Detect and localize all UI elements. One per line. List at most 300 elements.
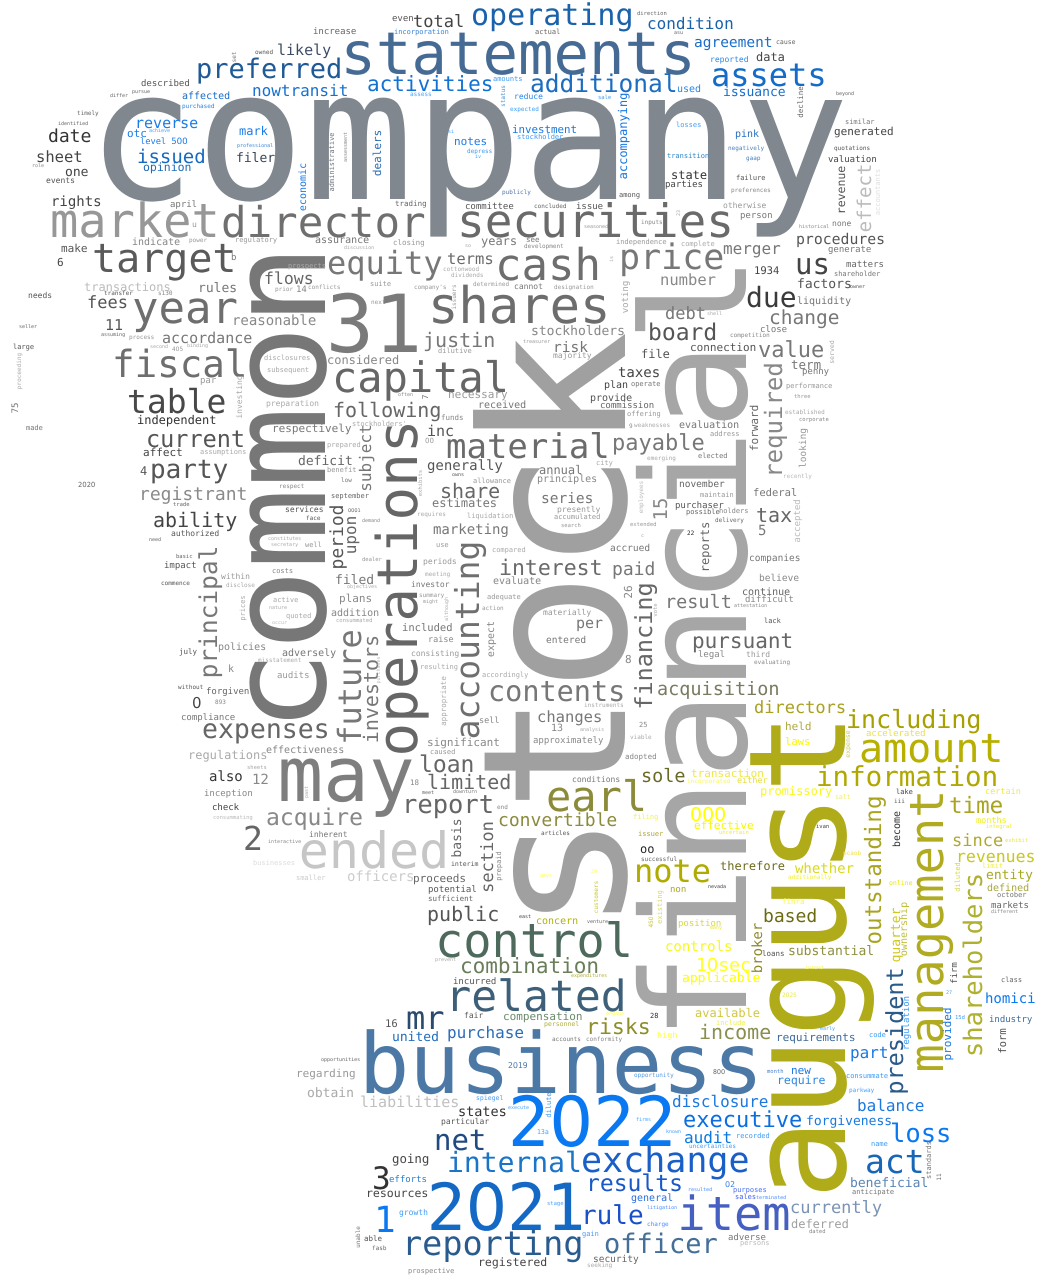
olive and yellow words: outstanding xyxy=(861,795,887,945)
middle grey words: possible xyxy=(686,508,720,516)
olive and yellow words: uncertain xyxy=(719,829,749,836)
middle grey words: elected xyxy=(698,452,728,460)
middle grey words xyxy=(78,362,812,926)
upper blue words: notes xyxy=(454,135,487,148)
olive and yellow words: months xyxy=(976,816,1007,826)
olive and yellow words: combination xyxy=(460,954,599,978)
lower blue and grey words: name xyxy=(871,1140,888,1148)
upper grey words: inputs xyxy=(641,219,663,226)
upper grey words: person xyxy=(740,211,773,221)
upper grey words: established xyxy=(785,409,825,416)
middle grey words: assumptions xyxy=(200,448,246,456)
word: stock: stock xyxy=(440,331,673,933)
upper grey words: term xyxy=(791,357,821,372)
middle grey words: conditions xyxy=(572,775,620,784)
olive and yellow words: incorporated xyxy=(687,778,731,785)
word: business: business xyxy=(359,1015,763,1113)
olive and yellow words: expenditures xyxy=(571,973,607,979)
upper grey words: rights xyxy=(51,194,102,210)
upper grey words: committee xyxy=(465,202,514,212)
upper grey words: pursue xyxy=(132,89,150,95)
upper grey words: 14 xyxy=(296,285,307,295)
lower blue and grey words: growth xyxy=(399,1208,428,1217)
middle grey words: costs xyxy=(272,567,293,575)
olive and yellow words: existing xyxy=(656,890,664,924)
middle grey words: recently xyxy=(783,473,812,480)
middle grey words: well xyxy=(305,541,322,549)
upper grey words: rules xyxy=(198,281,237,296)
middle grey words: might xyxy=(423,599,438,605)
upper blue words: depress xyxy=(467,148,493,155)
lower blue and grey words: loss xyxy=(890,1119,951,1149)
middle grey words: employees xyxy=(638,480,645,513)
middle grey words: city xyxy=(596,459,613,467)
upper grey words: issue xyxy=(576,202,603,212)
olive and yellow words: position xyxy=(678,919,721,929)
upper grey words: provide xyxy=(590,393,632,404)
upper grey words: sheet xyxy=(36,148,83,166)
upper grey words: independence xyxy=(616,238,667,246)
olive and yellow words: amount xyxy=(859,726,1004,772)
lower blue and grey words: litigation xyxy=(647,1205,677,1211)
upper blue words: sale xyxy=(598,94,611,101)
middle grey words: loan xyxy=(419,752,474,778)
upper grey words: make xyxy=(61,242,88,255)
lower blue and grey words: forgiveness xyxy=(806,1114,892,1129)
middle grey words: significant xyxy=(427,736,500,749)
lower blue and grey words: 800 xyxy=(713,1068,725,1076)
olive and yellow words: lake xyxy=(896,788,913,796)
upper grey words: date xyxy=(48,126,91,147)
lower blue and grey words: early xyxy=(820,1026,835,1032)
upper grey words: independent xyxy=(137,413,216,427)
middle grey words: consummating xyxy=(213,814,253,821)
upper grey words: 23 xyxy=(676,210,682,216)
middle grey words: quoted xyxy=(286,612,311,620)
middle grey words: 0001 xyxy=(348,508,361,514)
olive and yellow words: concern xyxy=(536,916,578,927)
olive and yellow words: certain xyxy=(985,787,1021,797)
upper grey words: assessment xyxy=(343,132,349,162)
olive and yellow words: high xyxy=(657,1031,677,1041)
lower blue and grey words: obtain xyxy=(307,1086,354,1101)
middle grey words: evaluating xyxy=(754,659,791,666)
upper grey words: generated xyxy=(834,125,894,138)
lower blue and grey words: spiegel xyxy=(476,1094,503,1102)
middle grey words: report xyxy=(402,790,494,820)
lower blue and grey words: adverse xyxy=(728,1233,766,1243)
upper grey words: change xyxy=(769,306,839,329)
middle grey words: without xyxy=(178,684,204,691)
olive and yellow words: october xyxy=(997,891,1027,899)
middle grey words: commence xyxy=(161,580,190,587)
upper grey words: par xyxy=(200,376,217,386)
upper grey words: funds xyxy=(441,413,464,422)
upper grey words: none xyxy=(832,219,851,228)
middle grey words: attestation xyxy=(734,603,767,609)
upper grey words: suite xyxy=(370,280,391,288)
upper blue words: condition xyxy=(647,14,734,33)
upper grey words: three xyxy=(794,393,811,400)
word: may: may xyxy=(277,730,415,819)
middle grey words: evaluate xyxy=(493,576,541,587)
word: management: management xyxy=(900,790,955,1072)
olive and yellow words: loans xyxy=(762,949,785,958)
olive and yellow words: laws xyxy=(785,736,810,748)
lower blue and grey words: states xyxy=(458,1104,507,1120)
upper grey words: considered xyxy=(327,353,399,367)
upper grey words: risk xyxy=(553,340,588,356)
middle grey words: section xyxy=(478,821,498,893)
middle grey words: extended xyxy=(630,521,656,528)
upper grey words: 75 xyxy=(11,403,21,413)
olive and yellow words: sole xyxy=(641,766,686,787)
lower blue and grey words: purchase xyxy=(447,1023,524,1042)
middle grey words: demand xyxy=(362,518,380,524)
olive and yellow words: conformity xyxy=(586,1036,623,1043)
middle grey words: viable xyxy=(630,734,652,741)
middle grey words: owns xyxy=(452,472,464,478)
lower blue and grey words: able xyxy=(364,1234,383,1243)
word: 31: 31 xyxy=(326,278,422,371)
upper grey words: year xyxy=(132,283,238,334)
upper grey words: procedures xyxy=(796,231,885,248)
middle grey words: search xyxy=(561,522,581,529)
middle grey words: consisting xyxy=(411,649,459,658)
upper grey words: valuation xyxy=(828,155,877,165)
lower blue and grey words: exchange xyxy=(581,1141,750,1181)
upper blue words: gaap xyxy=(746,155,761,162)
upper grey words: set xyxy=(231,51,238,62)
lower blue and grey words: purposes xyxy=(733,1186,767,1194)
upper grey words: made xyxy=(26,424,43,432)
olive and yellow words: revenues xyxy=(956,847,1035,866)
middle grey words: sheets xyxy=(247,764,267,771)
middle grey words: 15 xyxy=(650,498,672,520)
middle grey words: adopted xyxy=(625,752,657,761)
middle grey words: disclose xyxy=(226,582,255,589)
lower blue and grey words: prospective xyxy=(408,1267,454,1275)
middle grey words: analysis xyxy=(580,727,604,733)
upper grey words: us xyxy=(795,247,830,281)
middle grey words: effectiveness xyxy=(266,745,344,756)
middle grey words: investors xyxy=(359,635,383,743)
middle grey words: result xyxy=(665,592,732,613)
middle grey words: consummated xyxy=(336,617,372,624)
middle grey words: use xyxy=(436,541,449,549)
middle grey words: addition xyxy=(331,608,379,619)
lower blue and grey words: balance xyxy=(857,1096,924,1115)
upper blue words: economic xyxy=(298,163,309,211)
middle grey words: interactive xyxy=(268,839,301,845)
upper grey words: flows xyxy=(264,269,314,288)
upper grey words: terms xyxy=(447,250,494,268)
upper blue words: assess xyxy=(410,91,432,98)
upper grey words: described xyxy=(141,79,190,89)
middle grey words: accrued xyxy=(610,543,650,554)
upper grey words: april xyxy=(170,200,197,210)
olive and yellow words: accounts xyxy=(552,1036,581,1043)
upper blue words: agreement xyxy=(694,35,773,51)
lower blue and grey words: recorded xyxy=(736,1132,770,1140)
middle grey words: november xyxy=(679,479,725,490)
olive and yellow words: broker xyxy=(750,923,766,973)
middle grey words: accounting xyxy=(448,541,487,739)
lower blue and grey words: 11 xyxy=(936,1173,943,1181)
upper blue words: expected xyxy=(510,106,539,113)
upper grey words: target xyxy=(92,236,236,282)
lower blue and grey words: regarding xyxy=(296,1067,356,1080)
middle grey words: also xyxy=(209,769,243,785)
middle grey words: prepaid xyxy=(495,851,503,881)
upper grey words: transactions xyxy=(84,280,171,294)
olive and yellow words: shareholders xyxy=(959,873,989,1057)
middle grey words: contents xyxy=(488,675,625,708)
olive and yellow words: defined xyxy=(987,883,1029,894)
lower blue and grey words: homici xyxy=(985,991,1036,1007)
upper grey words: performance xyxy=(786,382,832,390)
middle grey words: believe xyxy=(759,573,799,584)
upper grey words: beyond xyxy=(836,91,854,97)
upper grey words: connection xyxy=(690,341,756,354)
middle grey words: period xyxy=(327,504,348,570)
olive and yellow words: finra xyxy=(782,897,805,906)
middle grey words: holders xyxy=(719,507,749,515)
olive and yellow words: therefore xyxy=(720,859,785,873)
middle grey words: address xyxy=(710,430,740,438)
upper grey words: close xyxy=(760,325,787,335)
upper grey words: respectively xyxy=(272,422,352,435)
olive and yellow words: accelerated xyxy=(866,729,926,739)
middle grey words: audits xyxy=(277,671,310,681)
upper blue words: level 500 xyxy=(140,137,188,147)
middle grey words: 18 xyxy=(410,778,420,787)
olive and yellow words: many xyxy=(710,925,722,931)
middle grey words: prices xyxy=(239,595,247,621)
lower blue and grey words: seeking xyxy=(587,1262,613,1269)
middle grey words: officers xyxy=(347,869,414,885)
middle grey words: active xyxy=(273,596,298,604)
olive and yellow words: engage xyxy=(606,1011,624,1017)
upper grey words: seasoned xyxy=(584,224,608,230)
olive and yellow words: income xyxy=(699,1020,771,1044)
olive and yellow words: integral xyxy=(986,823,1012,830)
middle grey words: raise xyxy=(428,635,454,645)
lower blue and grey words: firms xyxy=(636,1117,651,1123)
upper grey words: file xyxy=(641,347,670,361)
lower blue and grey words: class xyxy=(1001,976,1022,984)
upper grey words: owned xyxy=(255,49,273,56)
middle grey words: policies xyxy=(218,642,266,653)
upper grey words: stockholders xyxy=(531,324,625,339)
olive and yellow words: whether xyxy=(795,861,854,877)
upper blue words: achieve xyxy=(149,128,170,134)
middle grey words: regulations xyxy=(188,748,267,762)
upper grey words: shareholder xyxy=(834,270,880,278)
upper grey words: similar xyxy=(845,118,875,126)
olive and yellow words: note xyxy=(634,852,711,890)
upper grey words: fiscal xyxy=(112,342,247,386)
middle grey words: sell xyxy=(479,716,499,726)
middle grey words: 12 xyxy=(252,772,269,788)
middle grey words: adversely xyxy=(282,648,336,659)
lower blue and grey words: dated xyxy=(809,1228,826,1235)
middle grey words: objectives xyxy=(347,584,377,590)
middle grey words: smaller xyxy=(296,874,326,882)
lower blue and grey words: 13a xyxy=(537,1128,549,1136)
lower blue and grey words: 1 xyxy=(374,1200,396,1241)
upper blue words: reverse xyxy=(135,114,198,132)
middle grey words: 8 xyxy=(625,653,632,666)
middle grey words: affect xyxy=(143,446,183,459)
upper grey words: received xyxy=(478,400,526,411)
olive and yellow words: days xyxy=(540,873,552,879)
lower blue and grey words: mr xyxy=(406,999,445,1037)
olive and yellow words: intend xyxy=(805,965,823,971)
middle grey words: interest xyxy=(499,556,603,581)
middle grey words: purchaser xyxy=(675,501,724,511)
olive and yellow words: different xyxy=(991,909,1018,915)
upper grey words: quotations xyxy=(834,145,871,152)
lower blue and grey words: executive xyxy=(683,1108,802,1133)
middle grey words: july xyxy=(179,647,198,656)
upper grey words: accordance xyxy=(162,329,252,347)
olive and yellow words: limit xyxy=(982,862,1003,870)
olive and yellow words: effective xyxy=(694,819,754,832)
middle grey words: acquire xyxy=(266,805,363,831)
upper grey words: see xyxy=(526,235,540,244)
lower blue and grey words: united xyxy=(392,1030,439,1045)
lower blue and grey words: rule xyxy=(581,1201,644,1231)
upper grey words: binding xyxy=(187,343,208,349)
middle grey words: k xyxy=(228,664,234,675)
upper grey words: majority xyxy=(553,351,592,360)
middle grey words: public xyxy=(427,902,499,926)
middle grey words: action xyxy=(482,605,504,612)
upper grey words: penny xyxy=(802,367,830,377)
middle grey words: expenses xyxy=(202,714,330,745)
middle grey words: caused xyxy=(430,748,455,756)
upper grey words: weaknesses xyxy=(634,422,671,429)
upper grey words: board xyxy=(648,320,717,346)
word: common: common xyxy=(200,244,357,732)
middle grey words: instruments xyxy=(584,702,624,709)
upper blue words: incorporation xyxy=(394,28,449,36)
upper blue words: reduce xyxy=(514,92,543,101)
middle grey words: 13 xyxy=(551,723,563,734)
upper grey words: disclosures xyxy=(264,354,310,362)
middle grey words: emerging xyxy=(647,455,676,462)
upper grey words: investing xyxy=(235,375,244,419)
upper grey words: merger xyxy=(723,239,781,258)
upper grey words: concluded xyxy=(534,203,567,210)
lower blue and grey words: code xyxy=(869,1031,886,1039)
middle grey words: annual xyxy=(539,463,582,477)
middle grey words: low xyxy=(341,477,352,484)
upper grey words: matters xyxy=(846,260,884,270)
olive and yellow words: held xyxy=(785,720,812,733)
olive and yellow words: successful xyxy=(641,856,678,863)
upper grey words: closing xyxy=(393,238,425,247)
lower blue and grey words: internal xyxy=(447,1146,582,1179)
lower blue and grey words: registered xyxy=(478,1255,547,1269)
upper grey words: taxes xyxy=(618,365,660,381)
upper grey words: operate xyxy=(631,380,661,388)
middle grey words: included xyxy=(402,622,453,634)
upper grey words: cottonwood xyxy=(443,266,480,273)
middle grey words: party xyxy=(150,455,228,485)
olive and yellow words xyxy=(435,698,1035,1057)
lower blue and grey words: going xyxy=(392,1151,429,1166)
olive and yellow words: issuer xyxy=(638,830,663,838)
lower blue and grey words: persons xyxy=(740,1239,770,1247)
olive and yellow words: either xyxy=(737,776,768,786)
lower blue and grey words: requirements xyxy=(776,1031,855,1044)
lower blue and grey words: sales xyxy=(735,1193,756,1201)
upper blue words: dealers xyxy=(371,130,384,176)
middle grey words: meet xyxy=(422,790,434,796)
olive and yellow words: salt xyxy=(835,793,851,801)
olive and yellow words: pcaob xyxy=(843,850,861,857)
word: 2021: 2021 xyxy=(427,1171,585,1246)
middle grey words: potential xyxy=(428,885,477,895)
middle grey words: registrant xyxy=(139,484,247,505)
upper blue words: losses xyxy=(676,121,701,129)
middle grey words: payable xyxy=(612,431,705,456)
upper grey words: actual xyxy=(535,28,560,36)
lower blue and grey words: dilute xyxy=(545,1092,553,1118)
middle grey words: basis xyxy=(450,818,465,858)
olive and yellow words: personnel xyxy=(544,1020,579,1028)
upper grey words: often xyxy=(398,392,413,398)
upper blue words: issued xyxy=(137,146,206,168)
word: august: august xyxy=(720,712,877,1200)
middle grey words: 2020 xyxy=(78,481,95,489)
upper blue words: nowtransit xyxy=(252,81,348,100)
middle grey words: presently xyxy=(557,505,601,514)
upper grey words: table xyxy=(127,382,226,421)
upper grey words: subsequent xyxy=(267,366,309,374)
lower blue and grey words: currently xyxy=(790,1198,882,1218)
middle grey words: vote xyxy=(653,603,659,617)
upper grey words: proceeding xyxy=(16,353,23,389)
upper grey words: increase xyxy=(313,27,356,37)
upper grey words: competition xyxy=(730,332,770,339)
upper grey words: 9 xyxy=(629,423,633,430)
lower blue and grey words: liabilities xyxy=(360,1093,459,1111)
upper grey words: value xyxy=(758,338,824,363)
upper blue words: stockholder xyxy=(517,133,563,141)
upper grey words: commission xyxy=(600,401,654,411)
word: item: item xyxy=(677,1187,791,1242)
upper grey words: differ xyxy=(110,93,128,99)
middle grey words: 4 xyxy=(140,464,147,478)
lower blue and grey words: beneficial xyxy=(850,1176,928,1191)
middle grey words: expect xyxy=(486,621,497,657)
upper grey words: b xyxy=(231,253,236,263)
upper grey words: served xyxy=(828,340,836,364)
upper grey words: 1934 xyxy=(754,265,779,277)
middle grey words: compared xyxy=(492,546,526,554)
upper grey words: cannot xyxy=(514,282,543,291)
upper blue words: opinion xyxy=(143,160,191,174)
upper grey words: fees xyxy=(87,293,128,313)
upper grey words: preparation xyxy=(266,399,319,408)
upper blue words: iv xyxy=(475,154,481,160)
upper grey words: development xyxy=(524,243,564,250)
middle grey words: services xyxy=(285,505,324,514)
upper grey words: stockholders' xyxy=(352,420,407,428)
